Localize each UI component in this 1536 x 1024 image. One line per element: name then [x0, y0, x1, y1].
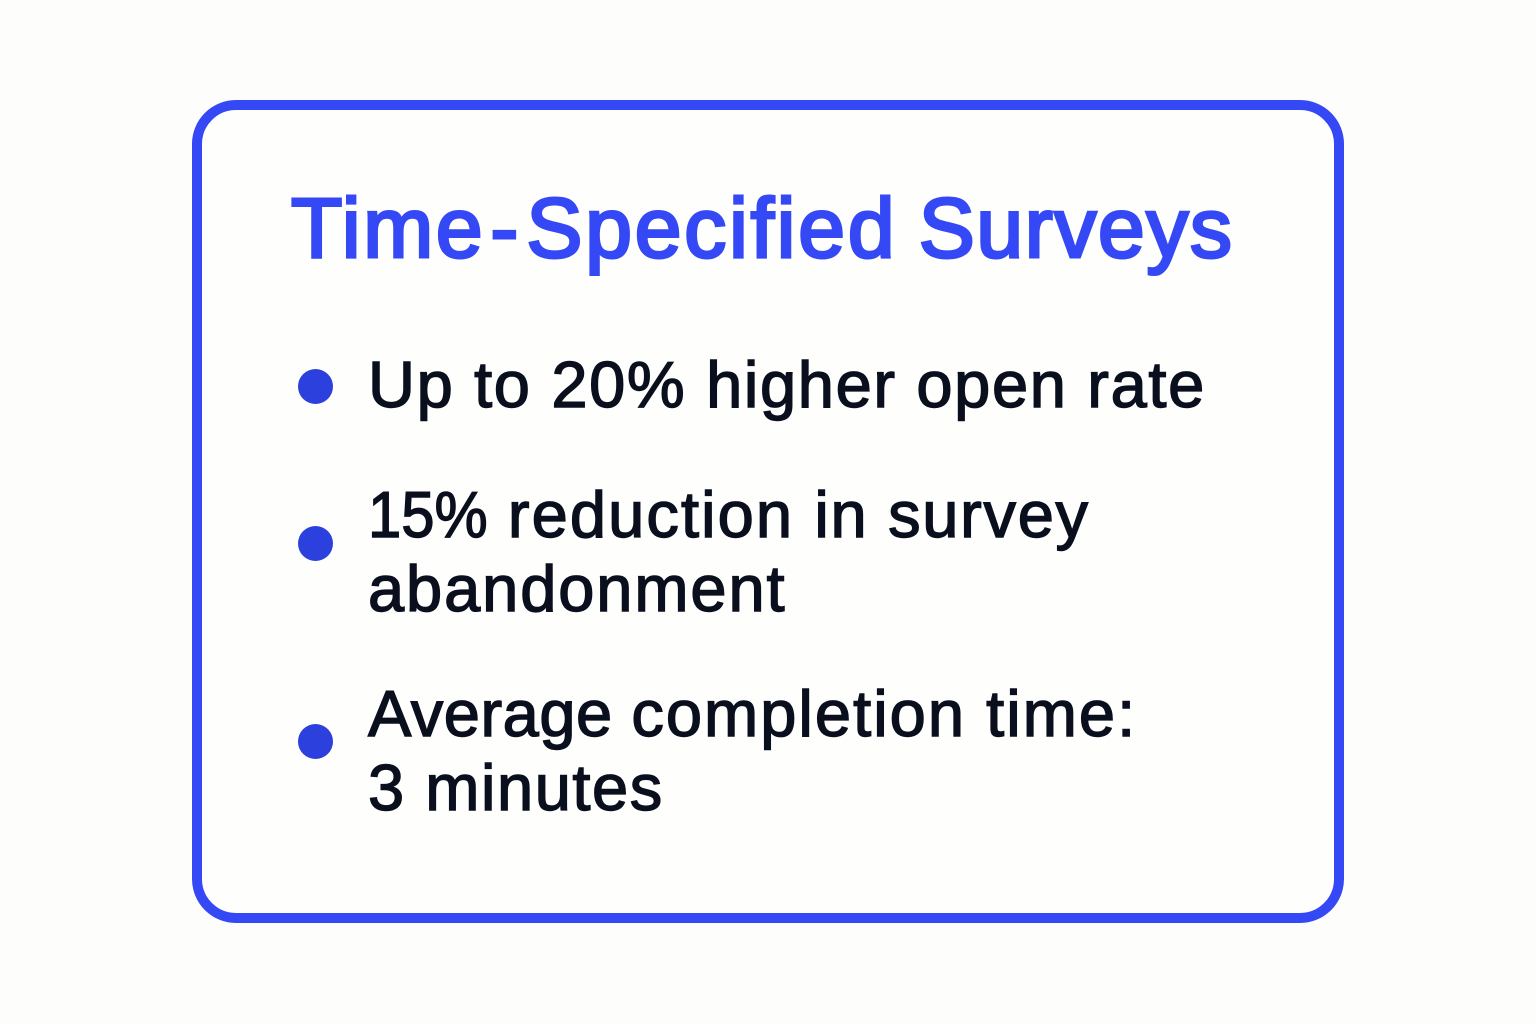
text: abandonment: abandonment [368, 552, 786, 625]
text: abandonment [368, 478, 1090, 625]
bullet icon 2 [298, 526, 333, 561]
title: Time-Specified Surveys [291, 181, 1234, 275]
bullet icon 1 [298, 369, 333, 404]
text: open rate: Up to 20% higher open rate [368, 348, 1206, 421]
text: abandonment: 15% [368, 478, 488, 551]
panel: survey card [192, 100, 1344, 923]
bullet icon 3 [298, 724, 333, 759]
text: completion time: Average completion time: [368, 677, 1137, 750]
text: completion time [367, 677, 1137, 824]
text: completion time: 3 minutes [368, 751, 664, 824]
text: abandonment: reduction in survey [508, 478, 1090, 551]
